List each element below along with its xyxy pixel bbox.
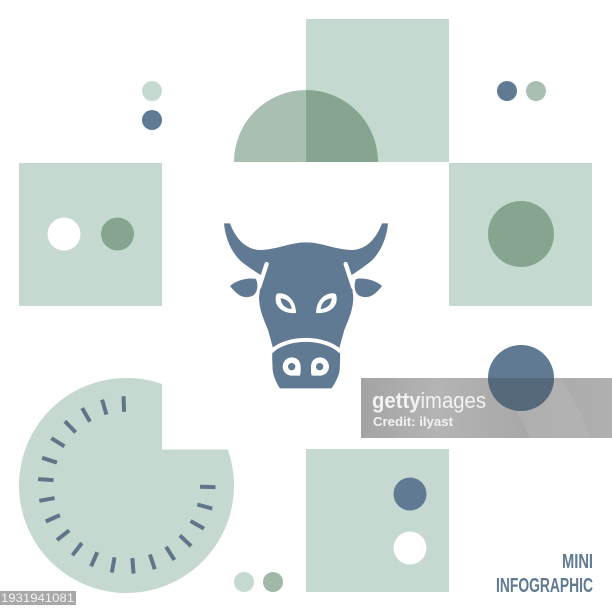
right nostril — [311, 357, 329, 376]
ear separators — [259, 264, 353, 287]
bull silhouette with horns — [224, 223, 388, 388]
dots: bottom pair — [234, 572, 283, 592]
watermark band: Credit: ilyast — [373, 414, 454, 429]
left ear — [230, 279, 257, 297]
left eye — [276, 293, 296, 313]
dots: top left pair — [142, 81, 162, 130]
dial: notched circle with ticks — [19, 378, 234, 593]
nose band — [271, 340, 341, 352]
title: mini infographic: MINI — [562, 551, 593, 573]
panel: bottom square — [306, 449, 449, 592]
panel: top square — [306, 19, 449, 162]
panel: left square — [19, 163, 162, 306]
dots: top right pair — [497, 81, 546, 101]
left nostril — [283, 357, 301, 376]
watermark band: gettyimages — [372, 388, 486, 413]
panel: right square — [449, 163, 592, 306]
image id tag: 1931941081 — [1, 593, 74, 605]
icon: bull head — [224, 223, 388, 388]
title: mini infographic — [496, 551, 593, 597]
right eye — [316, 293, 337, 313]
large blue circle — [488, 345, 554, 411]
right ear — [355, 279, 382, 297]
watermark band — [361, 378, 612, 438]
half circle — [234, 90, 378, 162]
